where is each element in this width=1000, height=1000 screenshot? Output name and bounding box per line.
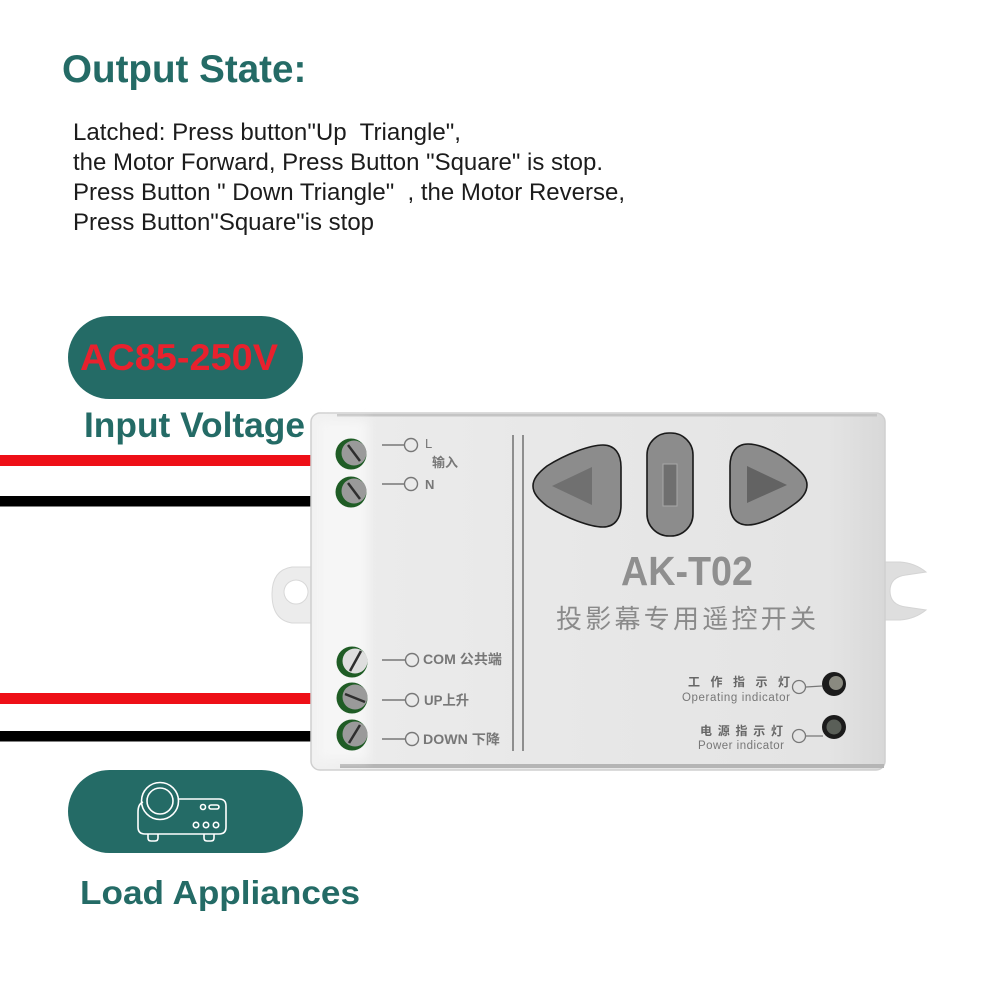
operating indicator xyxy=(682,672,846,704)
terminal markers xyxy=(382,438,418,746)
operating indicator: Operating indicator xyxy=(682,692,790,704)
terminal labels: UP上升 xyxy=(424,693,469,708)
mounting ear: left xyxy=(272,567,316,623)
chinese product name: 投影幕专用遥控开关 xyxy=(556,604,816,634)
relay device xyxy=(311,413,885,770)
description text: Press Button"Square"is stop xyxy=(73,209,374,236)
description text: Latched: Press button"Up Triangle", xyxy=(73,119,461,146)
icon: projector xyxy=(138,782,226,841)
model name: AK-T02 xyxy=(621,548,753,594)
operating indicator: 工 作 指 示 灯 xyxy=(688,674,790,689)
button: square xyxy=(647,433,693,536)
terminal labels: N xyxy=(425,477,434,492)
description text xyxy=(73,119,625,236)
terminal labels: 输入 xyxy=(432,455,458,470)
load appliances pill xyxy=(68,770,303,853)
button: right triangle xyxy=(730,444,807,525)
input wires xyxy=(0,455,312,506)
power indicator: Power indicator xyxy=(698,740,784,752)
title: Output State: xyxy=(62,48,306,91)
dividers xyxy=(513,435,523,751)
description text: Press Button " Down Triangle" , the Motor Reverse, xyxy=(73,179,625,206)
terminal labels xyxy=(423,436,502,747)
output wires xyxy=(0,693,312,742)
mounting ear: right xyxy=(882,562,926,620)
button: left triangle xyxy=(533,445,621,527)
power indicator: 电 源 指 示 灯 xyxy=(700,723,783,738)
description text: the Motor Forward, Press Button "Square" is stop. xyxy=(73,149,603,176)
terminal labels: DOWN 下降 xyxy=(423,731,501,747)
load appliances label: Load Appliances xyxy=(80,875,360,912)
screw terminals xyxy=(336,438,368,750)
input voltage pill xyxy=(68,316,303,399)
terminal labels: COM 公共端 xyxy=(423,652,502,667)
device body xyxy=(311,413,885,770)
power indicator xyxy=(698,715,846,752)
input voltage pill: AC85-250V xyxy=(80,337,278,378)
terminal labels: L xyxy=(425,436,432,451)
input voltage label: Input Voltage xyxy=(84,406,305,445)
